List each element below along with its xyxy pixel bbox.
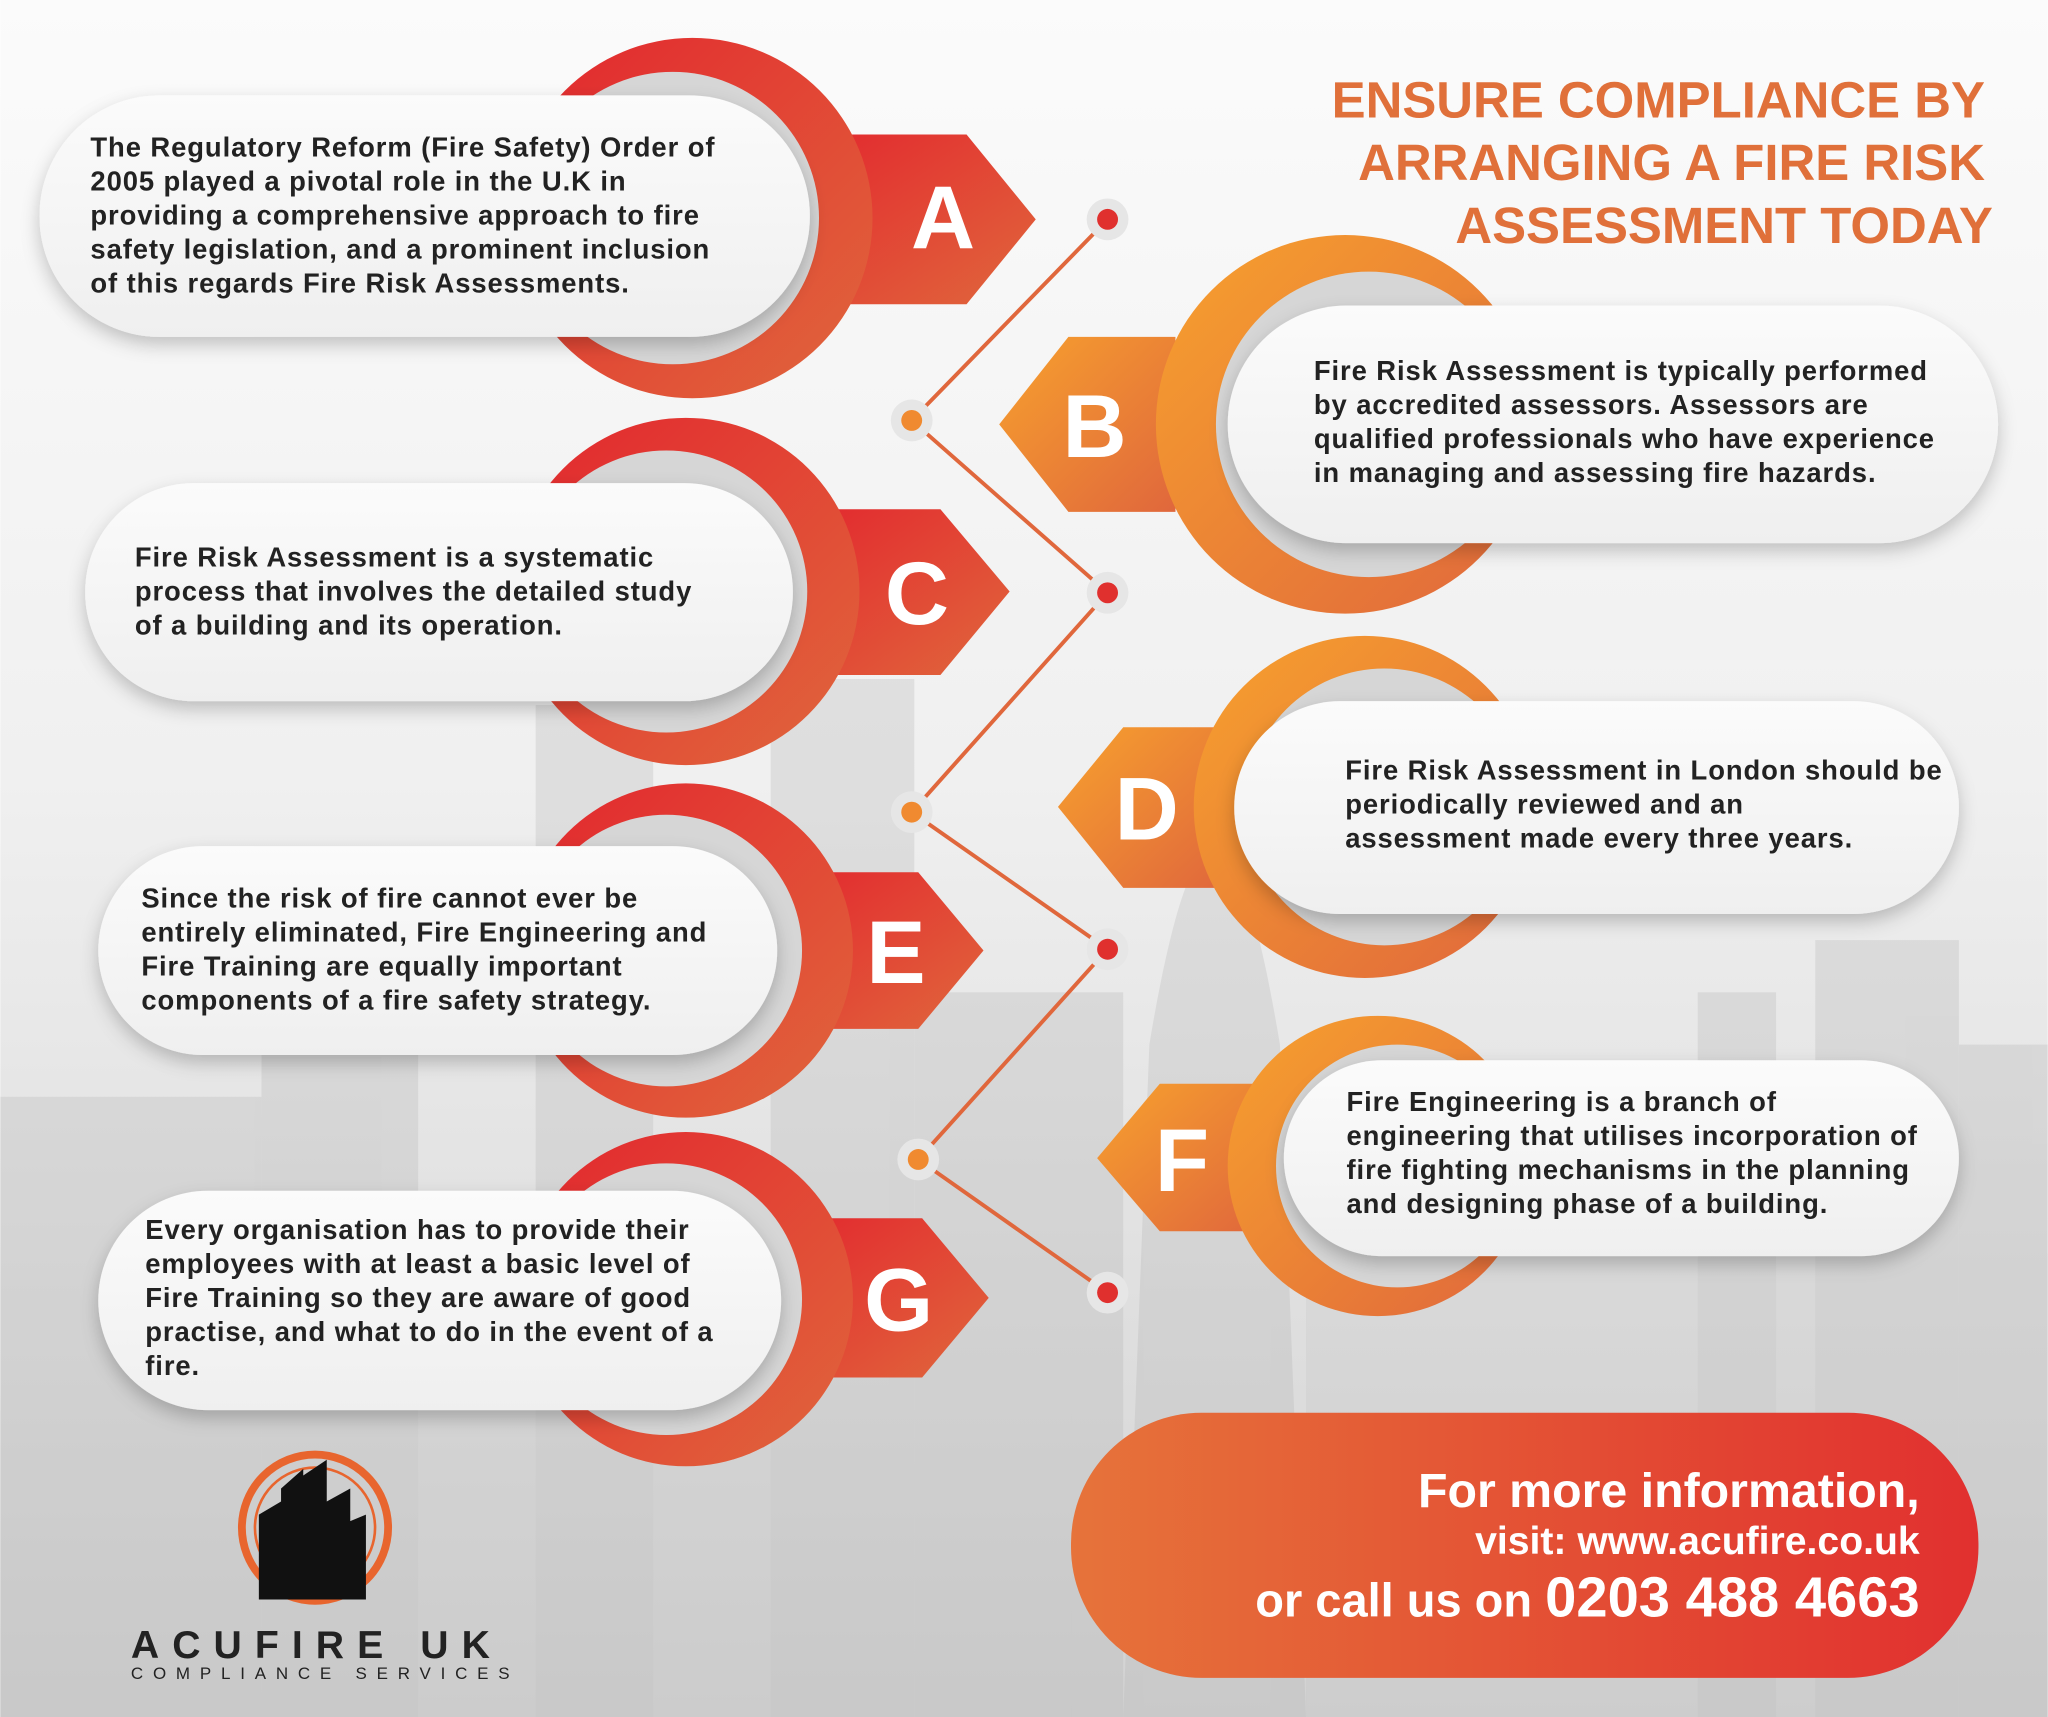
- item A: of this regards Fire Risk Assessments.: [90, 267, 630, 298]
- item A: providing a comprehensive approach to fire: [90, 200, 700, 231]
- item C: Fire Risk Assessment is a systematic: [135, 542, 654, 573]
- call to action: or call us on 0203 488 4663: [1255, 1565, 1920, 1628]
- item B: qualified professionals who have experience: [1314, 423, 1935, 454]
- item A: [39, 38, 1036, 398]
- logo: [131, 1455, 519, 1683]
- item F: fire fighting mechanisms in the planning: [1347, 1154, 1910, 1185]
- item A: A: [911, 168, 975, 267]
- item F: engineering that utilises incorporation of: [1347, 1120, 1918, 1151]
- call to action: visit: www.acufire.co.uk: [1475, 1520, 1920, 1563]
- item G: G: [864, 1251, 933, 1350]
- item F: F: [1155, 1111, 1209, 1210]
- item G: [98, 1132, 989, 1466]
- item C: [85, 418, 1010, 765]
- item E: Fire Training are equally important: [141, 950, 623, 981]
- item D: [1058, 636, 1959, 978]
- item G: fire.: [145, 1350, 200, 1381]
- connector lines: [891, 198, 1128, 1314]
- title: ENSURE COMPLIANCE BY: [1332, 72, 1985, 129]
- item C: of a building and its operation.: [135, 610, 563, 641]
- call to action: For more information,: [1418, 1464, 1920, 1518]
- title: [1332, 72, 1993, 254]
- item C: process that involves the detailed study: [135, 576, 692, 607]
- item F: and designing phase of a building.: [1347, 1188, 1828, 1219]
- item B: [999, 235, 1998, 614]
- item G: Every organisation has to provide their: [145, 1214, 690, 1245]
- item F: [1097, 1016, 1959, 1316]
- item A: The Regulatory Reform (Fire Safety) Order of: [90, 132, 715, 163]
- item E: entirely eliminated, Fire Engineering and: [141, 916, 707, 947]
- title: ASSESSMENT TODAY: [1455, 197, 1993, 254]
- title: ARRANGING A FIRE RISK: [1358, 134, 1985, 191]
- logo: COMPLIANCE SERVICES: [131, 1664, 519, 1683]
- item A: 2005 played a pivotal role in the U.K in: [90, 166, 627, 197]
- item G: practise, and what to do in the event of a: [145, 1316, 714, 1347]
- item D: D: [1115, 760, 1179, 859]
- item D: assessment made every three years.: [1345, 822, 1853, 853]
- item B: B: [1062, 377, 1127, 476]
- item D: Fire Risk Assessment in London should be: [1345, 755, 1943, 786]
- item F: Fire Engineering is a branch of: [1347, 1086, 1777, 1117]
- item G: employees with at least a basic level of: [145, 1248, 691, 1279]
- item E: E: [866, 903, 926, 1002]
- item E: Since the risk of fire cannot ever be: [141, 882, 638, 913]
- item B: by accredited assessors. Assessors are: [1314, 389, 1869, 420]
- item E: components of a fire safety strategy.: [141, 984, 651, 1015]
- item C: C: [885, 544, 949, 643]
- logo: ACUFIRE UK: [131, 1624, 503, 1667]
- item B: Fire Risk Assessment is typically performed: [1314, 355, 1928, 386]
- item A: safety legislation, and a prominent inclusion: [90, 234, 710, 265]
- item E: [98, 783, 984, 1118]
- item B: in managing and assessing fire hazards.: [1314, 457, 1876, 488]
- item G: Fire Training so they are aware of good: [145, 1282, 691, 1313]
- call to action: [1071, 1413, 1978, 1678]
- item D: periodically reviewed and an: [1345, 788, 1744, 819]
